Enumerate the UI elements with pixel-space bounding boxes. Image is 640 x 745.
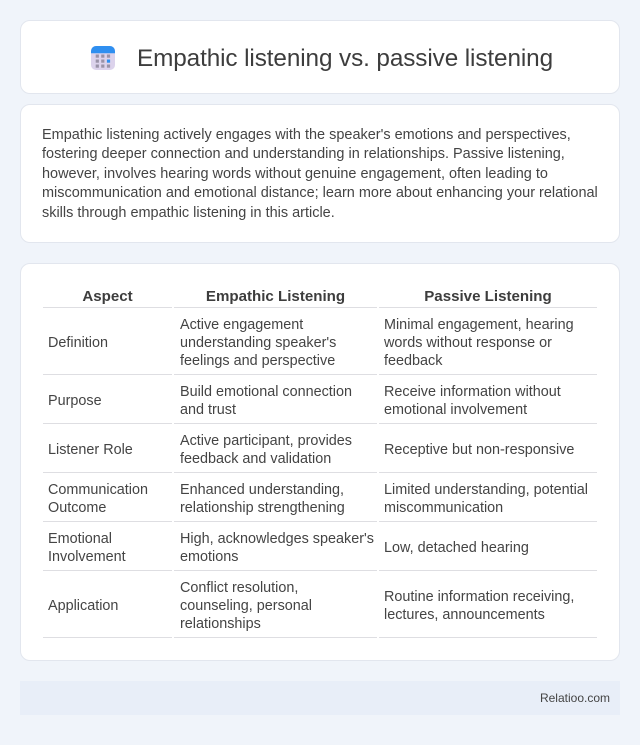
row: Definition: Definition xyxy=(48,335,108,351)
table header xyxy=(82,288,552,305)
row: Application: counseling, personal xyxy=(180,598,312,614)
row: Definition: feelings and perspective xyxy=(180,353,335,369)
row: Listener Role: Receptive but non-responsive xyxy=(384,442,574,458)
intro paragraph: skills through empathic listening in this article. xyxy=(42,204,335,220)
row: Purpose: emotional involvement xyxy=(384,402,527,418)
row: Definition: words without response or xyxy=(384,335,552,351)
row: Communication Outcome: Enhanced understanding, xyxy=(180,482,344,498)
panel: comparison table xyxy=(20,263,620,661)
row: Emotional Involvement: Emotional xyxy=(48,531,112,547)
row: Application: Routine information receiving, xyxy=(384,589,574,605)
row: Listener Role: feedback and validation xyxy=(180,451,331,467)
panel: intro text xyxy=(20,104,620,243)
row: Purpose: Build emotional connection xyxy=(180,384,352,400)
title: Empathic listening vs. passive listening xyxy=(137,45,553,72)
row: Definition: Minimal engagement, hearing xyxy=(384,317,574,333)
row: Purpose: and trust xyxy=(180,402,236,418)
row: Listener Role: Active participant, provides xyxy=(180,433,352,449)
row: Application xyxy=(48,580,574,632)
intro paragraph xyxy=(42,126,598,220)
row: Communication Outcome: Communication xyxy=(48,482,148,498)
intro paragraph: however, involves hearing words without genuine engagement, often leading to xyxy=(42,166,548,182)
row: Application: Application xyxy=(48,598,118,614)
row: Purpose: Receive information without xyxy=(384,384,561,400)
row: Emotional Involvement xyxy=(48,531,529,565)
row: Definition: feedback xyxy=(384,353,442,369)
row: Purpose: Purpose xyxy=(48,393,102,409)
row: Emotional Involvement: High, acknowledges speaker's xyxy=(180,531,374,547)
row: Purpose xyxy=(48,384,561,418)
row: Communication Outcome: Limited understanding, potential xyxy=(384,482,588,498)
footer text: Relatioo.com: Relatioo.com xyxy=(540,691,610,705)
row: Communication Outcome: Outcome xyxy=(48,500,106,516)
row: Listener Role xyxy=(48,433,574,467)
icon: calendar xyxy=(91,46,115,70)
row: Emotional Involvement: Involvement xyxy=(48,549,126,565)
row: Definition: Active engagement xyxy=(180,317,303,333)
row: Communication Outcome: miscommunication xyxy=(384,500,503,516)
table header: Empathic Listening xyxy=(206,288,345,305)
intro paragraph: Empathic listening actively engages with the speaker's emotions and perspectives, xyxy=(42,126,571,142)
intro paragraph: fostering deeper connection and understanding in relationships. Passive listening, xyxy=(42,146,565,162)
panel: title card xyxy=(20,20,620,94)
row: Application: Conflict resolution, xyxy=(180,580,298,596)
intro paragraph: miscommunication and emotional distance; learn more about enhancing your relational xyxy=(42,185,598,201)
footer bar xyxy=(20,681,620,715)
row: Application: lectures, announcements xyxy=(384,607,545,623)
row: Emotional Involvement: Low, detached hearing xyxy=(384,540,529,556)
row: Application: relationships xyxy=(180,616,261,632)
row: Emotional Involvement: emotions xyxy=(180,549,238,565)
table header: Passive Listening xyxy=(424,288,552,305)
row: Definition xyxy=(48,317,574,369)
row: Definition: understanding speaker's xyxy=(180,335,336,351)
row: Listener Role: Listener Role xyxy=(48,442,133,458)
row: Communication Outcome: relationship strengthening xyxy=(180,500,345,516)
row: Communication Outcome xyxy=(48,482,588,516)
table header: Aspect xyxy=(82,288,133,305)
